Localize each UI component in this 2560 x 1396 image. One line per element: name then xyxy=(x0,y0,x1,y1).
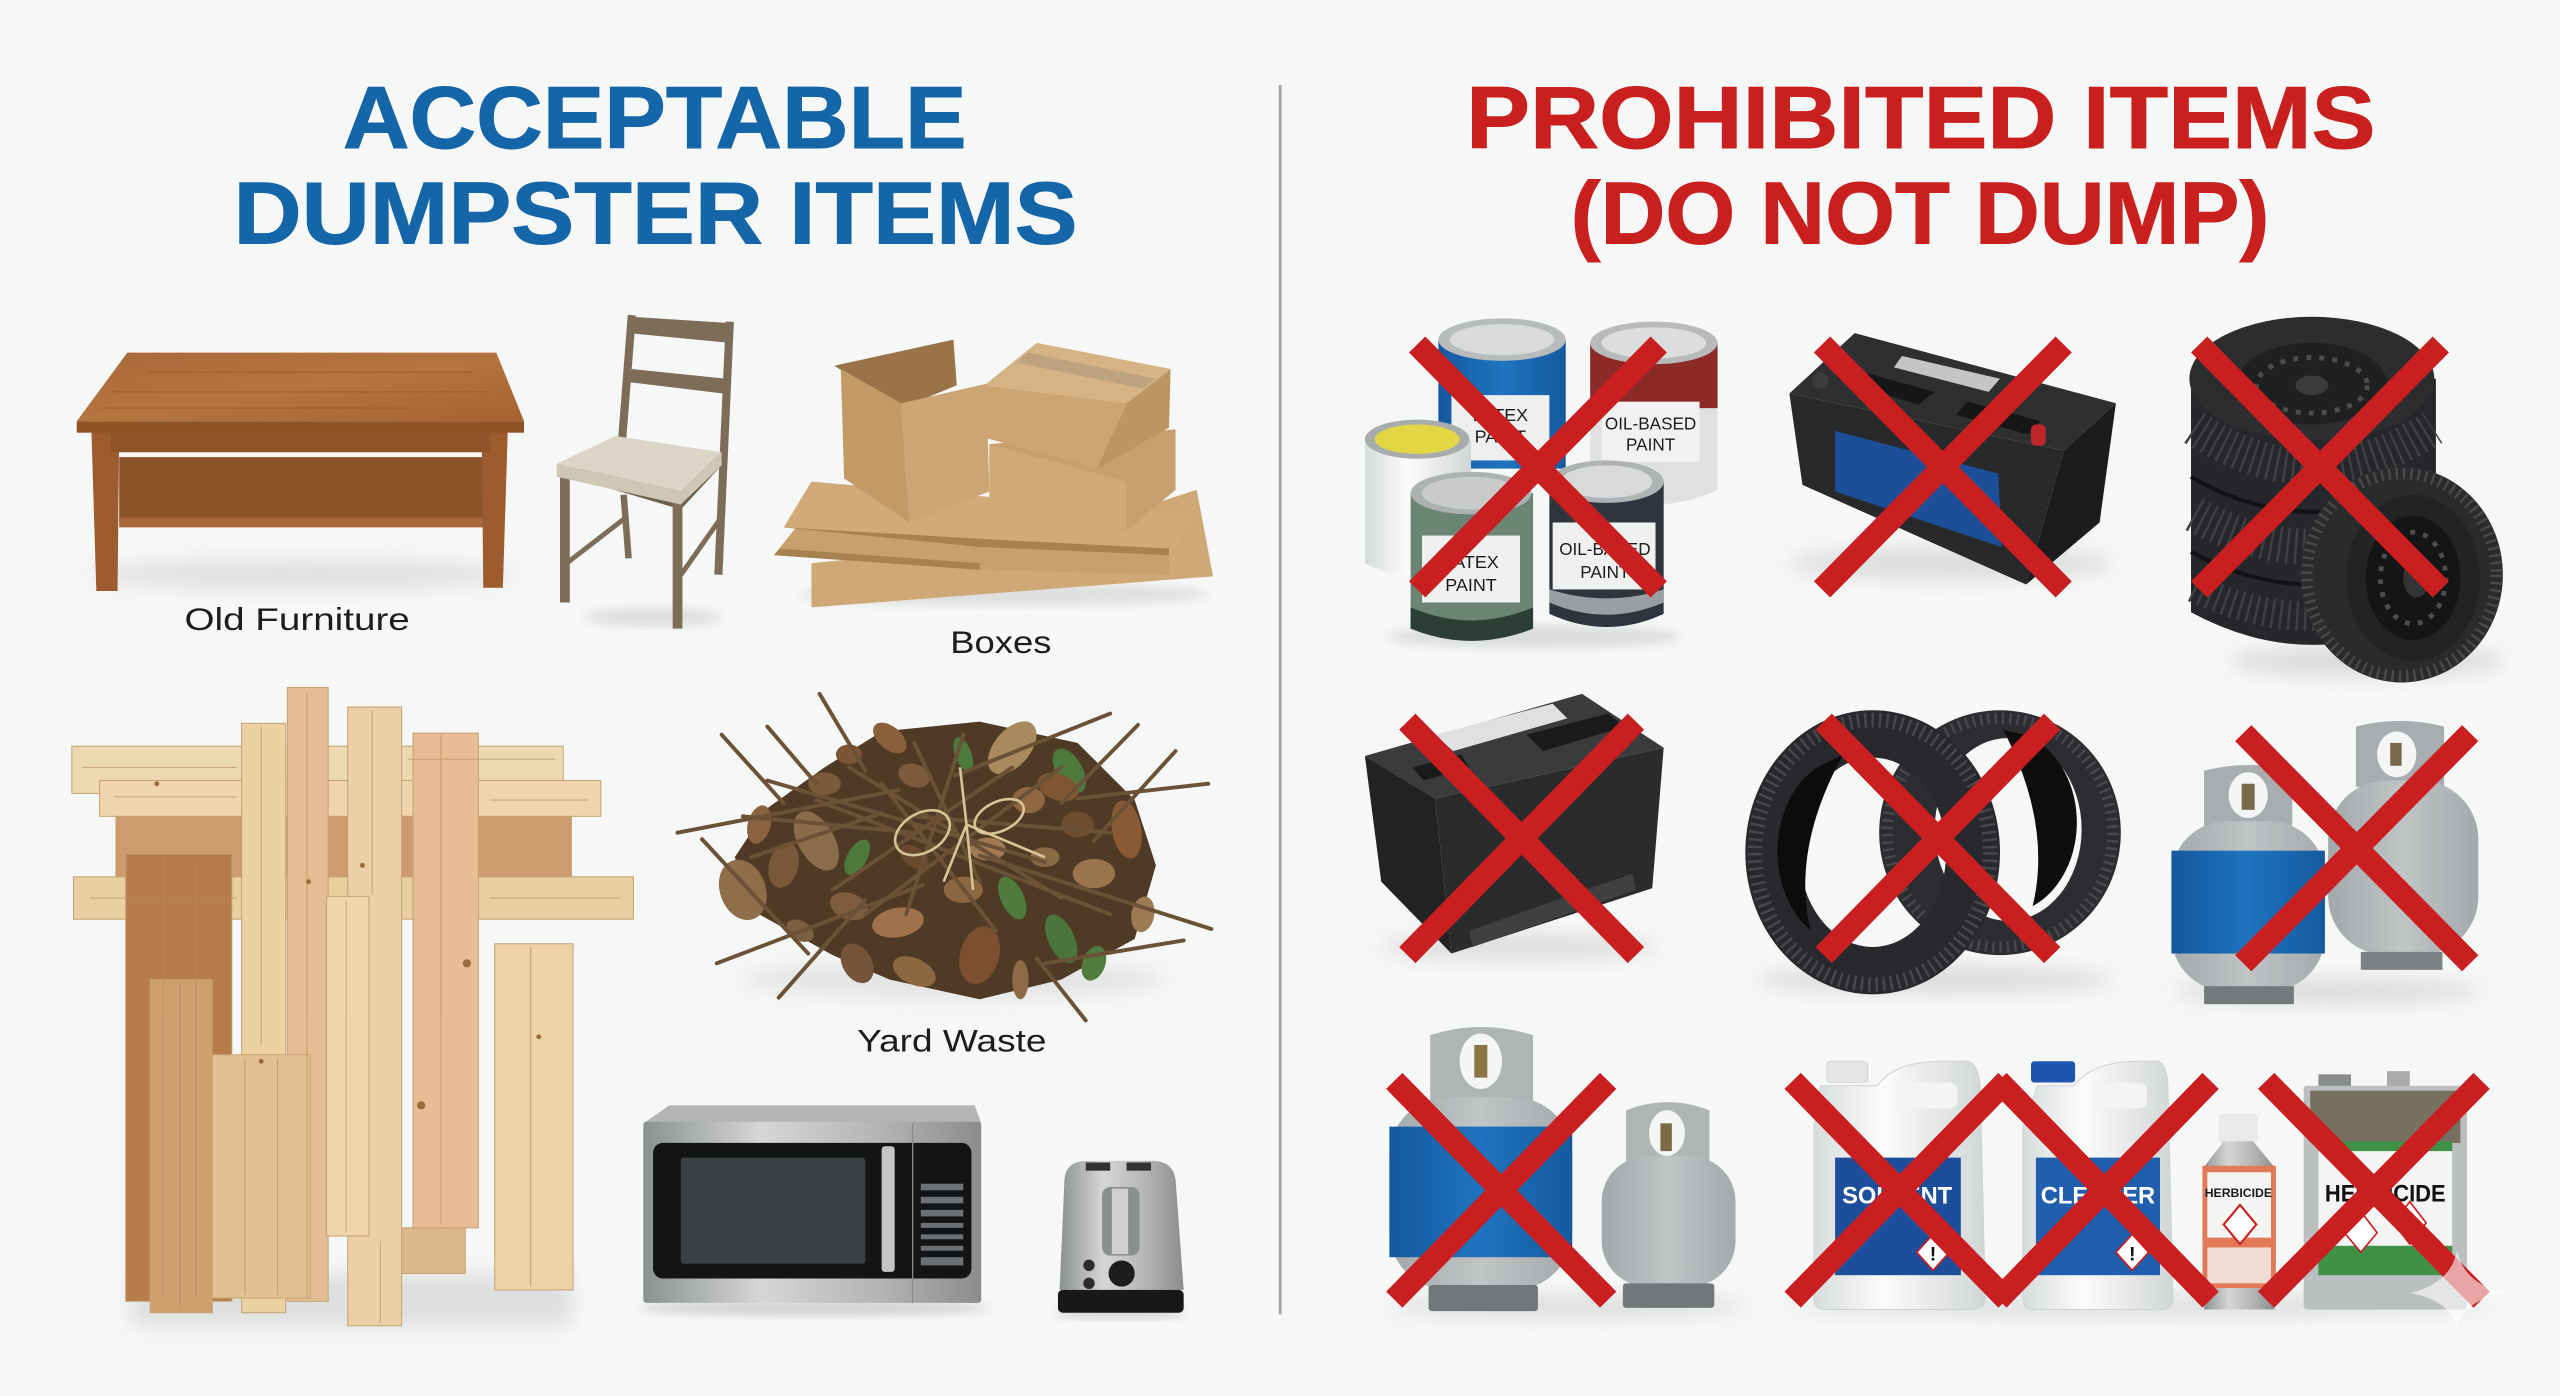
heading: acceptable dumpster items: DUMPSTER ITEMS xyxy=(233,163,1078,262)
watermark sparkle xyxy=(2410,1251,2504,1329)
icon: paint cans: PAINT xyxy=(1445,575,1497,595)
heading: acceptable dumpster items: ACCEPTABLE xyxy=(343,68,967,167)
heading: prohibited items: PROHIBITED ITEMS xyxy=(1466,68,2376,167)
heading: prohibited items xyxy=(1466,68,2376,262)
herbicide spray can: HERBICIDE xyxy=(2205,1186,2272,1200)
icon: cardboard boxes xyxy=(774,340,1213,607)
herbicide metal can: HERBICIDE xyxy=(2325,1182,2446,1208)
icon: paint cans: LATEX xyxy=(1443,552,1499,572)
icon: paint cans: PAINT xyxy=(1580,562,1630,582)
solvent jug: ! xyxy=(1930,1243,1936,1265)
heading: prohibited items: (DO NOT DUMP) xyxy=(1571,163,2269,262)
icon: wooden coffee table xyxy=(77,353,524,591)
icon: black car battery xyxy=(1365,694,1664,960)
icon: paint cans: PAINT xyxy=(1626,435,1676,455)
herbicide spray can xyxy=(2202,1114,2276,1309)
cleaner jug: ! xyxy=(2129,1243,2136,1265)
icon: lumber pile xyxy=(72,687,633,1326)
cleaner jug xyxy=(2023,1061,2173,1309)
panel: prohibited items xyxy=(1365,317,2506,1329)
solvent jug: SOLVENT xyxy=(1842,1183,1953,1209)
icon: toaster xyxy=(1055,1161,1185,1319)
heading: acceptable dumpster items xyxy=(233,68,1078,262)
icon: stack of tires with wheels xyxy=(2189,317,2506,682)
icon: paint cans: OIL-BASED xyxy=(1605,413,1696,433)
panel: acceptable items xyxy=(72,315,1213,1326)
solvent jug xyxy=(1814,1061,1985,1309)
icon: propane tanks, blue and gray xyxy=(2171,721,2482,1004)
label: yard waste: Yard Waste xyxy=(857,1022,1047,1058)
icon: wooden chair xyxy=(557,315,733,629)
icon: pair of tires xyxy=(1745,710,2121,994)
cleaner jug: CLEANER xyxy=(2041,1183,2155,1209)
herbicide metal can xyxy=(2304,1071,2467,1309)
red X marks xyxy=(1394,345,2482,1300)
icon: yard waste bundle xyxy=(678,694,1211,1020)
icon: paint cans xyxy=(1365,318,1718,648)
label: old furniture: Old Furniture xyxy=(184,601,410,637)
icon: microwave oven xyxy=(637,1105,989,1316)
icon: car battery with blue panel xyxy=(1788,333,2116,585)
icon: chemical jugs and containers xyxy=(1788,1061,2490,1316)
icon: paint cans: OIL-BASED xyxy=(1559,539,1651,559)
label: boxes: Boxes xyxy=(950,624,1051,660)
icon: propane tanks, large and small xyxy=(1388,1027,1747,1318)
icon: paint cans: PAINT xyxy=(1475,426,1526,446)
icon: paint cans: LATEX xyxy=(1473,405,1528,425)
